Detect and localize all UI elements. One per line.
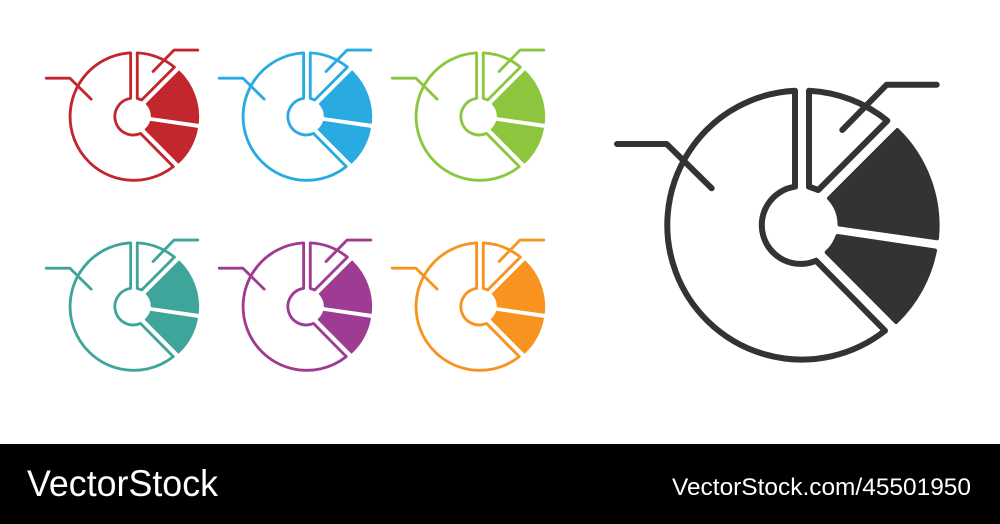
footer bar [0, 444, 1000, 524]
icon: green pie chart [392, 50, 544, 180]
icon: teal pie chart [46, 240, 198, 370]
icon: orange pie chart [392, 240, 544, 370]
icon: purple pie chart [219, 240, 371, 370]
footer logo text: VectorStock [27, 463, 218, 504]
icon: red pie chart [46, 50, 198, 180]
icon: large dark pie chart [617, 85, 938, 360]
icon: blue pie chart [219, 50, 371, 180]
footer image id text: VectorStock.com/45501950 [672, 474, 971, 501]
